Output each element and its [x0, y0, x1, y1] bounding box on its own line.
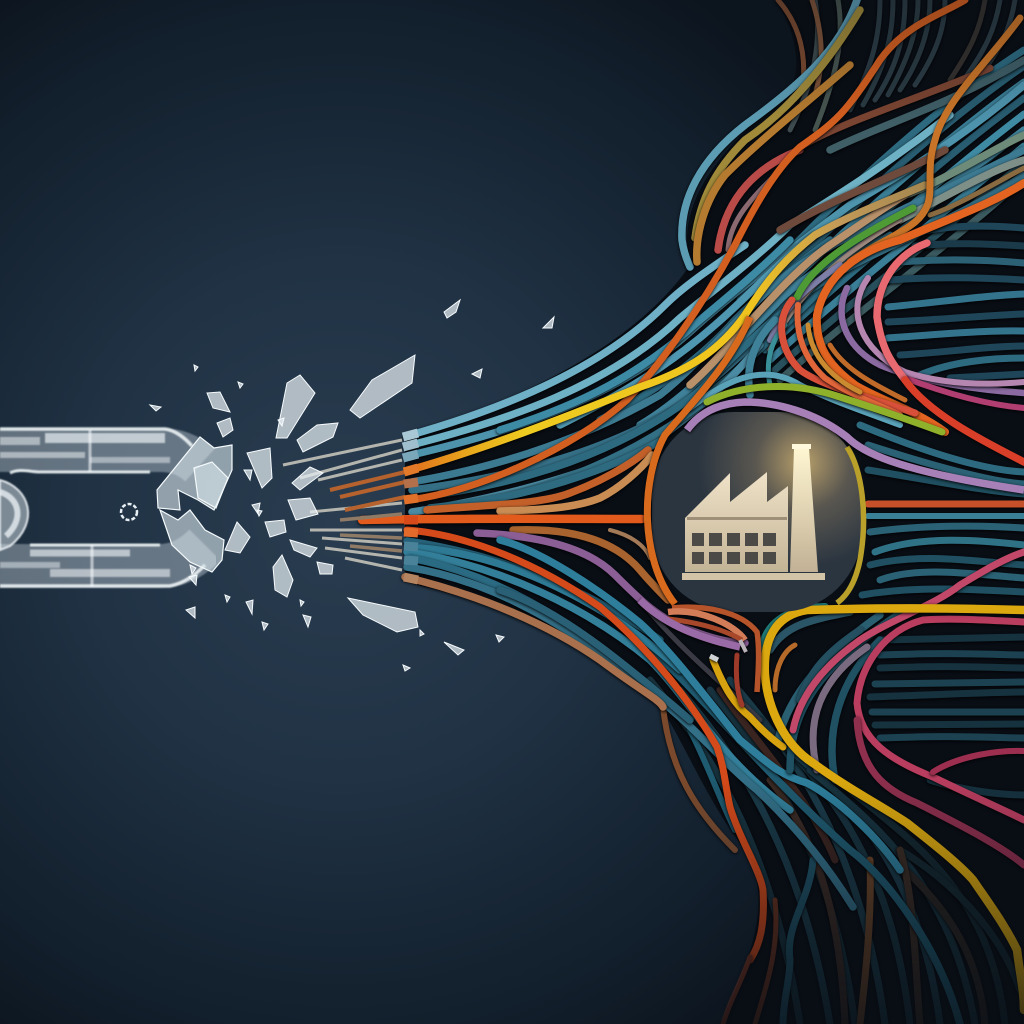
link highlights [0, 429, 205, 587]
badge rim: orange left [647, 317, 750, 604]
cables: upper teal bundle [407, 0, 1024, 512]
broken glass chain link [0, 429, 205, 587]
link left curl [0, 480, 28, 550]
glass shards [150, 300, 554, 671]
wire ferrules [403, 433, 418, 580]
cables: dim vertical strands at top [778, 0, 1015, 130]
stripped wire strands at fan origin [283, 433, 418, 580]
saw-tooth roof and wall [685, 472, 788, 572]
cables: orange and teal right of factory [868, 504, 1024, 516]
link bottom band [0, 545, 205, 566]
factory icon [682, 444, 825, 580]
roof band [687, 517, 787, 520]
all cables [362, 0, 1024, 1024]
cables: right side horizontal teal rows [860, 226, 1024, 795]
base [682, 573, 825, 580]
windows [692, 533, 776, 564]
link top band [0, 450, 200, 465]
wire knot: salmon loops [640, 600, 759, 692]
cables: lower right loops [713, 552, 1024, 1010]
small glass ring [121, 504, 137, 520]
cables: main bright wires above factory [410, 0, 1024, 500]
cables: fan middle and lower [362, 450, 960, 1024]
cables: upper right diagonal teal family [700, 50, 1024, 400]
factory badge [640, 317, 1024, 692]
chimney cap [792, 444, 811, 449]
badge rim: yellow right [837, 447, 864, 603]
cables: lower mass family [650, 680, 1020, 1024]
chimney [790, 448, 818, 572]
dark cable mass behind wires [405, 0, 1024, 1024]
lavender wire over badge [687, 402, 1024, 490]
shattered link end [157, 437, 232, 572]
badge background [652, 412, 862, 612]
